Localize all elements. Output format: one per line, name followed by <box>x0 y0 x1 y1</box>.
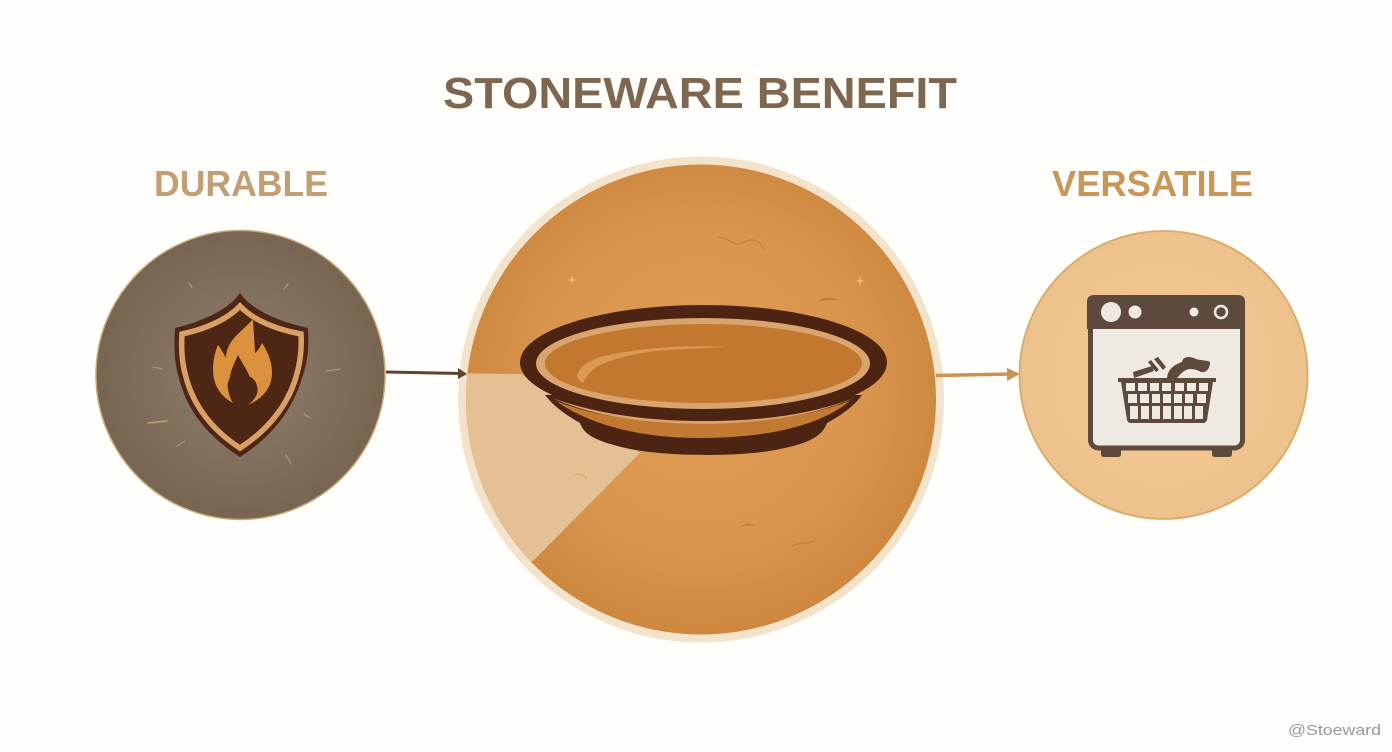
panel: versatile circle <box>1020 231 1308 519</box>
arrow: durable to centre <box>386 368 467 379</box>
sparkles <box>567 275 865 287</box>
icon: flame shield <box>174 293 308 457</box>
control panel <box>1087 295 1245 329</box>
basket holes <box>1126 383 1208 419</box>
flame <box>213 319 272 405</box>
highlight <box>577 346 728 383</box>
panel: central circle <box>440 156 944 642</box>
heading: durable: DURABLE <box>154 163 328 204</box>
heading: versatile: VERSATILE <box>1052 163 1253 204</box>
bowl side <box>556 401 850 438</box>
panel: durable circle <box>96 230 385 520</box>
body <box>1090 320 1242 448</box>
texture marks <box>153 283 340 464</box>
icon: bowl <box>520 305 887 455</box>
light wedge <box>466 373 640 561</box>
bowl base <box>545 395 862 455</box>
feet <box>1101 448 1121 457</box>
rim <box>520 305 887 420</box>
control knobs <box>1101 302 1121 322</box>
watermark: @Stoeward <box>1288 722 1381 739</box>
title: STONEWARE BENEFIT <box>443 69 957 118</box>
basket <box>1118 378 1216 423</box>
texture marks <box>573 237 814 547</box>
icon: dishwasher with basket <box>1087 295 1245 457</box>
arrow: centre to versatile <box>936 368 1020 381</box>
dishes in basket <box>1133 357 1166 378</box>
